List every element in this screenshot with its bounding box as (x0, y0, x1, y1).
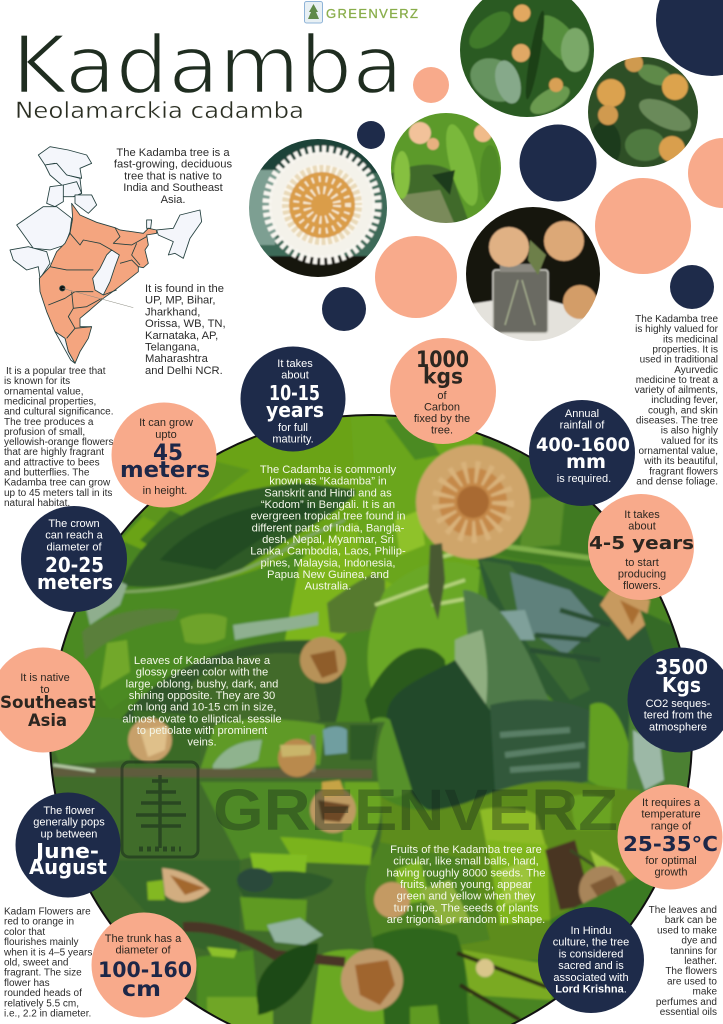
text: uses of leaves and flowers: dye and (681, 936, 717, 947)
stat: crown diameter: meters (37, 570, 113, 594)
stat: 1000 kgs carbon (390, 338, 496, 444)
text: leaves: cm long and 10-15 cm in size, (128, 702, 276, 714)
stat: 1000 kgs carbon: fixed by the (414, 413, 470, 425)
stat: height 45 meters (112, 402, 216, 508)
text: kadam flowers: flower has (4, 978, 50, 989)
text: fruits: fruits, when young, appear (400, 879, 532, 891)
text: kadam flowers: when it is 4–5 years (3, 947, 92, 958)
state borders (48, 228, 147, 338)
stat: Hindu culture: associated with (553, 972, 629, 984)
stat: 1000 kgs carbon: of (437, 390, 448, 402)
text: popular tree: Kadamba tree can grow (4, 478, 111, 489)
text: uses of leaves and flowers: are used to (667, 976, 717, 987)
text: kadam flowers: fragrant. The size (4, 968, 82, 979)
logo: Greenverz (304, 2, 418, 23)
stat: 1000 kgs carbon: tree. (431, 424, 453, 436)
stat: native to Southeast Asia: It is native (20, 672, 70, 684)
text: popular tree: natural habitat. (4, 498, 70, 509)
stat: flowering age: flowers. (623, 580, 661, 592)
stat: flowering season: generally pops (33, 817, 105, 829)
stat: crown diameter (21, 506, 127, 612)
photo: bright leaves (388, 110, 504, 225)
logo: Greenverz: GREENVERZ (326, 6, 418, 21)
stat: temperature range: for optimal (645, 855, 697, 867)
text: popular tree: is known for its (4, 376, 70, 387)
stat: native to Southeast Asia: Asia (28, 711, 67, 731)
text: leaves: to petiolate with prominent (137, 725, 268, 737)
text: kadam flowers: relatively 5.5 cm, (4, 998, 79, 1009)
stat: native to Southeast Asia: Southeast (0, 693, 96, 713)
stat: trunk diameter (92, 912, 196, 1018)
stat: temperature range: temperature (641, 809, 701, 821)
text: where it is found: Telangana, (145, 342, 200, 354)
text: medicinal properties: is highly valued for (635, 324, 719, 335)
text: uses of leaves and flowers: essential oils (660, 1007, 717, 1018)
text: where it is found: Maharashtra (145, 353, 209, 365)
stat: Hindu culture: culture, the tree (553, 937, 629, 949)
stat: temperature range (618, 784, 722, 890)
photo: ripe fruits among leaves (585, 54, 700, 170)
stat: temperature range: range of (651, 820, 692, 832)
stat: 1000 kgs carbon: 1000 (416, 348, 469, 373)
text: common names: The Cadamba is commonly (260, 464, 396, 476)
text: common names: Papua New Guinea, and (267, 569, 389, 581)
text: leaves: veins. (187, 737, 217, 749)
decorative circles (322, 0, 723, 331)
text: intro: Asia. (161, 194, 185, 206)
stat: CO2 sequestered: Kgs (662, 673, 701, 697)
text: popular tree: ornamental value, (4, 386, 84, 397)
text: medicinal properties: diseases. The tree (636, 416, 718, 426)
text: intro: The Kadamba tree is a (116, 147, 230, 159)
text: where it is found: UP, MP, Bihar, (145, 295, 215, 307)
text: fruits: turn ripe. The seeds of plants (394, 902, 539, 914)
stat: height 45 meters: in height. (143, 485, 187, 497)
stat: CO2 sequestered (628, 648, 723, 752)
text: uses of leaves and flowers: leather. (684, 956, 717, 967)
stat: flowering age: 4-5 years (589, 533, 694, 554)
text: medicinal properties: and dense foliage. (636, 476, 718, 487)
stat: CO2 sequestered: CO2 seques- (646, 698, 711, 710)
map pointer (60, 286, 133, 308)
stat: maturity 10-15 years: years (266, 398, 324, 422)
text: uses of leaves and flowers: bark can be (665, 915, 717, 926)
stat: annual rainfall (529, 400, 635, 506)
text: common names: desh, Nepal, Myanmar, Sri (262, 534, 394, 546)
text: kadam flowers: color that (4, 927, 45, 938)
Kerala (55, 332, 75, 363)
lower right foliage (387, 660, 497, 813)
text: fruits: circular, like small balls, hard, (393, 856, 539, 868)
text: leaves: large, oblong, bushy, dark, and (126, 678, 278, 690)
stat: annual rainfall: rainfall of (560, 420, 605, 432)
text: common names: Sanskrit and Hindi and as (264, 487, 392, 499)
stat: 1000 kgs carbon: Carbon (424, 402, 460, 414)
text: common names: evergreen tropical tree found in (251, 511, 405, 523)
text: leaves: Leaves of Kadamba have a (134, 655, 271, 667)
stat: crown diameter: can reach a (45, 530, 104, 542)
text: popular tree: up to 45 meters tall in its (4, 488, 112, 499)
text: uses of leaves and flowers: The flowers (665, 966, 717, 977)
stat: flowering age: It takes (624, 509, 660, 521)
title: Kadamba (12, 19, 403, 112)
stat: Hindu culture: sacred and is (558, 960, 624, 972)
text: common names: known as “Kadamba” in (269, 476, 387, 488)
text: medicinal properties: is also highly (661, 426, 718, 437)
stat: CO2 sequestered: atmosphere (649, 721, 707, 733)
stat: maturity 10-15 years: It takes (277, 358, 313, 370)
text: intro: India and Southeast (123, 182, 224, 194)
text: kadam flowers: Kadam Flowers are (4, 906, 91, 918)
text: common names: Lanka, Cambodia, Laos, Philip- (250, 546, 406, 558)
text: leaves: almost ovate to elliptical, sessile (122, 713, 282, 725)
stat: maturity 10-15 years (240, 346, 346, 452)
stat: trunk diameter: 100-160 (98, 958, 192, 982)
text: leaves: glossy green color with the (136, 667, 268, 679)
northern, western and north-eastern states (10, 147, 202, 278)
lower left foliage (40, 722, 385, 1024)
stat: flowering season: June- (34, 839, 99, 863)
text: medicinal properties: cough, and skin (648, 405, 718, 416)
stat: native to Southeast Asia (0, 648, 96, 752)
photo: kadamba flower close-up (249, 139, 387, 277)
text: popular tree: and cultural significance. (4, 407, 114, 418)
fruits (128, 637, 403, 1011)
text: kadam flowers: rounded heads of (4, 988, 82, 999)
stat: temperature range: 25-35°C (623, 832, 718, 856)
text: uses of leaves and flowers: make (693, 987, 717, 998)
stat: maturity 10-15 years: maturity. (272, 434, 314, 446)
text: medicinal properties: The Kadamba tree (635, 314, 718, 325)
text: popular tree: profusion of small, (4, 427, 85, 438)
stat: CO2 sequestered: tered from the (644, 710, 712, 722)
text: medicinal properties: properties. It is (652, 344, 718, 355)
stat: annual rainfall: mm (566, 451, 606, 473)
map: India with highlighted states (10, 147, 202, 363)
text: common names: Australia. (305, 581, 351, 593)
text: fruits: green and yellow when they (397, 891, 536, 903)
stat: height 45 meters: meters (120, 458, 210, 483)
text: medicinal properties: including fever, (651, 395, 718, 406)
stat: Hindu culture (538, 907, 644, 1013)
text: where it is found: It is found in the (145, 283, 224, 295)
stat: flowering season: up between (41, 828, 97, 840)
stat: maturity 10-15 years: for full (278, 422, 308, 434)
stat: CO2 sequestered: 3500 (655, 655, 708, 679)
stat: flowering age: producing (618, 568, 666, 580)
stat: flowering season: August (29, 855, 107, 879)
text: medicinal properties: its medicinal (663, 334, 718, 345)
text: popular tree: and attractive to bees (4, 457, 100, 468)
foliage artwork (40, 405, 710, 1024)
text: popular tree: yellowish-orange flowers (4, 437, 114, 448)
stat: crown diameter: 20-25 (45, 553, 104, 577)
text: uses of leaves and flowers: used to make (657, 925, 717, 936)
text: kadam flowers: i.e., 2.2 in diameter. (4, 1008, 91, 1020)
stat: flowering season (16, 792, 120, 898)
text: fruits: Fruits of the Kadamba tree are (390, 844, 542, 856)
stat: flowering season: The flower (43, 805, 95, 817)
text: where it is found: Orissa, WB, TN, (145, 318, 226, 330)
text: common names: pines, Malaysia, Indonesia, (261, 557, 395, 569)
text: uses of leaves and flowers: tannins for (670, 946, 718, 957)
text: kadam flowers: red to orange in (4, 917, 74, 928)
text: medicinal properties: ornamental value, (638, 446, 718, 457)
text: kadam flowers: flourishes mainly (4, 937, 78, 948)
stat: annual rainfall: Annual (565, 408, 599, 420)
stat: Hindu culture: In Hindu (571, 925, 611, 937)
stat: Hindu culture: Lord Krishna. (555, 984, 627, 996)
stat: annual rainfall: 400-1600 (536, 434, 630, 456)
stat: height 45 meters: 45 (153, 441, 183, 466)
text: popular tree: and butterflies. The (4, 468, 90, 478)
Chhattisgarh (93, 250, 119, 295)
photo: leaves with fruits (460, 0, 594, 117)
text: medicinal properties: Ayurvedic (674, 365, 718, 376)
text: medicinal properties: with its beautiful, (643, 456, 718, 467)
text: kadam flowers: old, sweet and (4, 958, 68, 968)
subtitle: Neolamarckia cadamba (15, 99, 304, 124)
tree watermark logo (122, 762, 198, 857)
circle outline (50, 415, 692, 1024)
text: fruits: having roughly 8000 seeds. The (386, 867, 546, 879)
stat: temperature range: It requires a (642, 797, 701, 809)
text: where it is found: Jharkhand, (145, 306, 200, 318)
stat: trunk diameter: cm (122, 977, 161, 1001)
text: intro: tree that is native to (124, 170, 222, 182)
text: popular tree: medicinal properties, (4, 396, 96, 407)
stat: maturity 10-15 years: about (281, 370, 309, 382)
highlighted states (39, 203, 157, 363)
text: leaves: shining opposite. They are 30 (129, 690, 275, 702)
kadamba flower (416, 445, 530, 620)
text: uses of leaves and flowers: perfumes and (656, 997, 717, 1008)
text: medicinal properties: valued for its (661, 436, 718, 447)
text: where it is found: Karnataka, AP, (145, 330, 218, 342)
text: common names: different parts of India, Bangla- (252, 522, 405, 534)
text: popular tree: that are highly fragrant (4, 447, 104, 458)
text: medicinal properties: fragrant flowers (649, 466, 718, 477)
upper right foliage (354, 434, 484, 584)
stat: flowering age (588, 494, 694, 600)
stat: trunk diameter: The trunk has a (105, 933, 182, 945)
stat: 1000 kgs carbon: kgs (423, 364, 463, 388)
stat: height 45 meters: upto (155, 429, 177, 441)
stat: temperature range: growth (654, 867, 688, 879)
text: popular tree: The tree produces a (4, 417, 94, 428)
watermark wordmark: GREENVERZ (213, 778, 618, 843)
text: medicinal properties: medicine to treat a (636, 375, 718, 386)
stat: crown diameter: The crown (48, 518, 100, 530)
stat: Hindu culture: is considered (559, 948, 623, 960)
stat: annual rainfall: is required. (557, 473, 611, 485)
stat: flowering age: to start (625, 557, 659, 569)
text: fruits: are trigonal or random in shape. (387, 914, 545, 926)
text: common names: “Kodom” in Bengali. It is an (261, 499, 395, 511)
text: where it is found: and Delhi NCR. (145, 365, 223, 377)
stat: crown diameter: diameter of (46, 541, 102, 553)
panel: foliage circle (40, 405, 710, 1024)
text: uses of leaves and flowers: The leaves and (649, 905, 717, 916)
text: medicinal properties: used in traditional (640, 355, 718, 366)
text: intro: fast-growing, deciduous (114, 159, 232, 171)
text: medicinal properties: variety of ailments, (635, 385, 718, 396)
stat: maturity 10-15 years: 10-15 (269, 381, 320, 405)
stat: height 45 meters: It can grow (139, 417, 193, 429)
stat: native to Southeast Asia: to (40, 684, 50, 696)
text: popular tree: It is a popular tree that (6, 366, 106, 377)
stat: trunk diameter: diameter of (115, 945, 171, 957)
stat: flowering age: about (628, 521, 656, 533)
photo: flowers in glass jar (464, 205, 602, 343)
